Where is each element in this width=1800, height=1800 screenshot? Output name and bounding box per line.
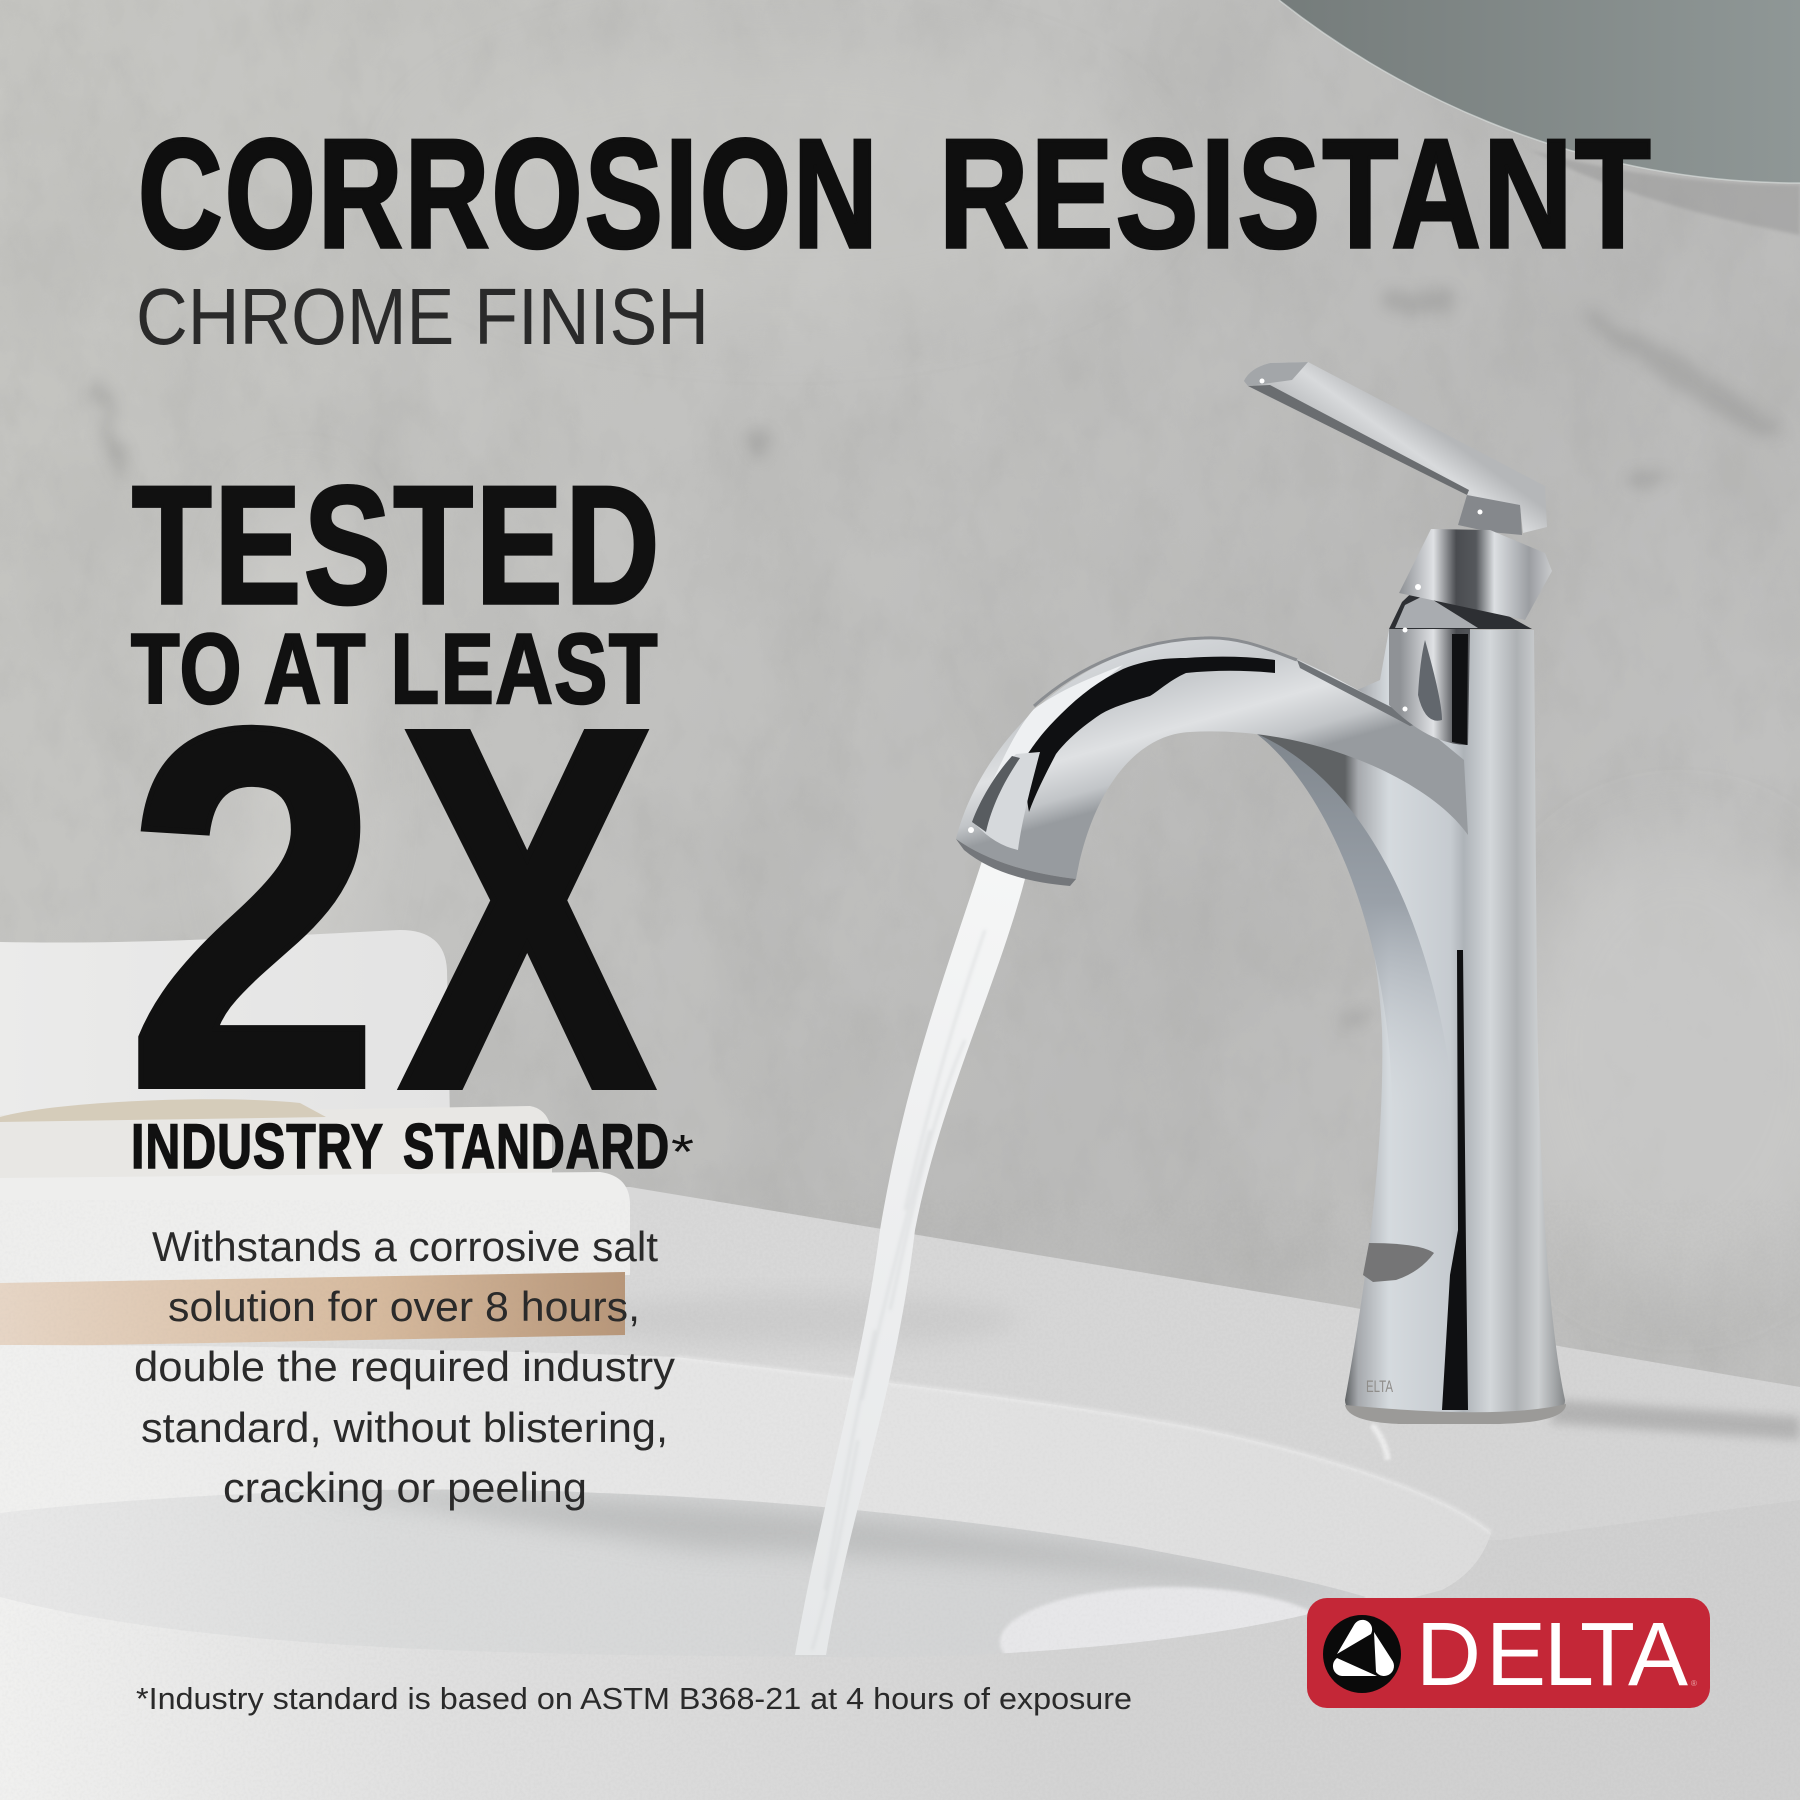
standard: STANDARD [403, 1112, 670, 1182]
footnote: *Industry standard is based on ASTM B368-21 at 4 hours of exposure [136, 1681, 1132, 1716]
tested: TESTED [132, 451, 662, 639]
collar reflection [1418, 640, 1442, 721]
industry: INDUSTRY [131, 1112, 384, 1182]
asterisk: * [671, 1126, 694, 1179]
heading: corrosion resistant: CORROSION [138, 107, 880, 280]
collar [1389, 629, 1470, 745]
towels and tray [0, 930, 630, 1347]
registered mark: ® [1691, 1679, 1697, 1688]
handle cap [1399, 529, 1552, 620]
logo: Delta [1307, 1598, 1710, 1708]
X: X [399, 622, 657, 1195]
stream of water [795, 861, 1027, 1655]
sink basin [0, 1490, 1365, 1653]
tray upper block [0, 1106, 552, 1182]
spout thin outer edge [1034, 638, 1297, 706]
countertop [0, 1187, 1800, 1800]
lever [1244, 362, 1547, 533]
body copy: standard, without blistering, [141, 1404, 668, 1451]
spout dark reflection [1025, 657, 1275, 812]
countertop grain [0, 1200, 1800, 1800]
logo mark [1323, 1615, 1401, 1693]
heading: corrosion resistant [138, 107, 1653, 280]
handle neck [1458, 495, 1522, 535]
collar dark shadow [1452, 634, 1468, 745]
collar left highlight [1395, 595, 1478, 628]
mirror shadow on wall [1530, 150, 1800, 235]
body copy [134, 1223, 675, 1511]
tan strip [0, 1099, 326, 1122]
body copy: solution for over 8 hours, [168, 1283, 640, 1330]
body copy: Withstands a corrosive salt [152, 1223, 658, 1270]
lever lower edge [1248, 385, 1469, 495]
base notch [1363, 1243, 1434, 1282]
spout top highlight [985, 665, 1123, 820]
mirror [1279, 0, 1800, 183]
base engraved mark: ELTA [1366, 1377, 1393, 1396]
front counter [0, 1500, 1800, 1800]
towel [0, 930, 450, 1120]
spout tip dark facet [972, 756, 1020, 832]
faucet [956, 362, 1566, 1424]
collar top neck [1389, 585, 1532, 629]
base dark stripe [1442, 950, 1468, 1410]
body copy: double the required industry [134, 1343, 675, 1390]
lever tip [1244, 362, 1308, 386]
spout tip panel [976, 752, 1040, 850]
claim: tested to at least 2X industry standard [125, 451, 694, 1195]
wood base [0, 1272, 625, 1347]
spout aerator underside [956, 839, 1076, 886]
logo wordmark: DELTA [1416, 1605, 1688, 1705]
sparkles [968, 378, 1482, 833]
sink rim [0, 1345, 1491, 1610]
faucet inner arch shadow [1257, 734, 1455, 1110]
faucet body [1257, 630, 1565, 1422]
spout top right ridge [1297, 660, 1424, 726]
faucet spout [956, 638, 1468, 879]
body copy: cracking or peeling [223, 1464, 587, 1511]
logo badge [1307, 1598, 1710, 1708]
faucet cast shadow [1549, 1400, 1800, 1440]
base ring [1345, 1404, 1566, 1424]
background: marble wall [0, 0, 1800, 1400]
tray lower block [0, 1172, 630, 1285]
subheading: chrome finish: CHROME FINISH [136, 272, 709, 361]
to at least: TO AT LEAST [131, 613, 659, 724]
2: 2 [125, 622, 381, 1195]
